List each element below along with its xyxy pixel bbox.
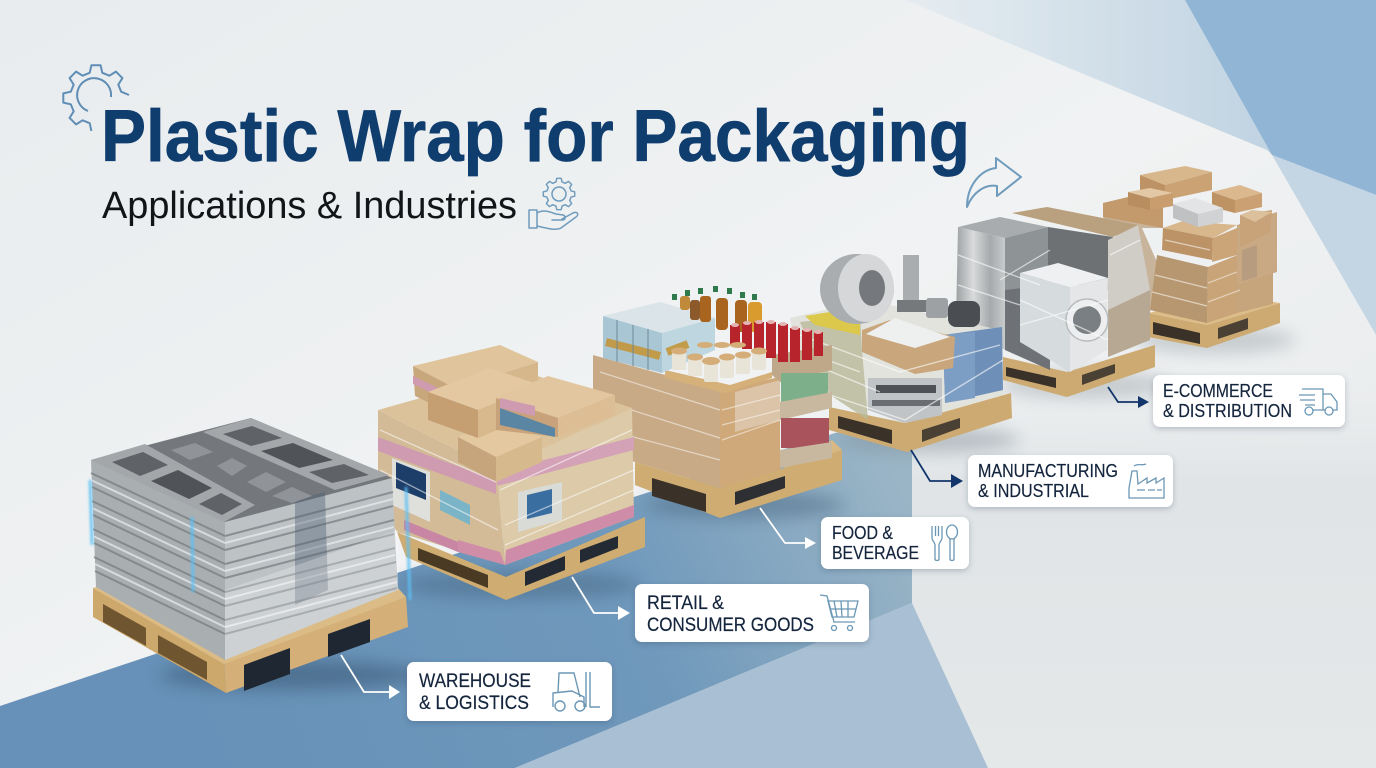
pallet: warehouse and logistics [90, 418, 420, 693]
label: warehouse and logistics: WAREHOUSE [419, 671, 531, 692]
arrow: warehouse [341, 655, 400, 699]
icon: forklift [553, 672, 600, 711]
label: manufacturing and industrial [968, 455, 1173, 507]
icon: gear on open hand [529, 178, 578, 229]
label: e-commerce and distribution: & DISTRIBUTION [1163, 401, 1292, 421]
label: warehouse and logistics [407, 662, 612, 721]
label: manufacturing and industrial: MANUFACTURING [978, 460, 1118, 481]
label: e-commerce and distribution [1153, 375, 1345, 427]
label: e-commerce and distribution: E-COMMERCE [1163, 381, 1273, 401]
label: retail and consumer goods [635, 584, 869, 642]
arrow: retail [572, 577, 630, 620]
icon: large gear behind title [63, 65, 129, 131]
label: retail and consumer goods: RETAIL & [647, 593, 724, 614]
label: warehouse and logistics: & LOGISTICS [419, 693, 529, 714]
label: food and beverage: FOOD & [832, 523, 893, 543]
icon: factory [1129, 464, 1164, 498]
pallet: food and beverage [593, 286, 845, 519]
pallet: manufacturing and industrial [790, 254, 1020, 453]
label: food and beverage: BEVERAGE [832, 543, 919, 563]
label: food and beverage [821, 517, 969, 569]
icon: curved arrow [967, 158, 1021, 207]
icon: fork and spoon [932, 525, 958, 560]
icon: shopping cart [820, 595, 858, 630]
label: retail and consumer goods: CONSUMER GOODS [647, 615, 814, 636]
pallet: retail and consumer goods [378, 345, 645, 600]
arrow: manufacturing [911, 450, 963, 488]
label: manufacturing and industrial: & INDUSTRIAL [978, 480, 1089, 501]
pallet: e-commerce cartons [1103, 166, 1295, 354]
arrow: e-commerce [1108, 387, 1149, 408]
subtitle: Applications & Industries [102, 185, 517, 227]
title: Plastic Wrap for Packaging [101, 96, 970, 177]
arrow: food [760, 508, 816, 549]
icon: delivery truck [1299, 389, 1337, 415]
pallet: appliances [956, 207, 1170, 399]
